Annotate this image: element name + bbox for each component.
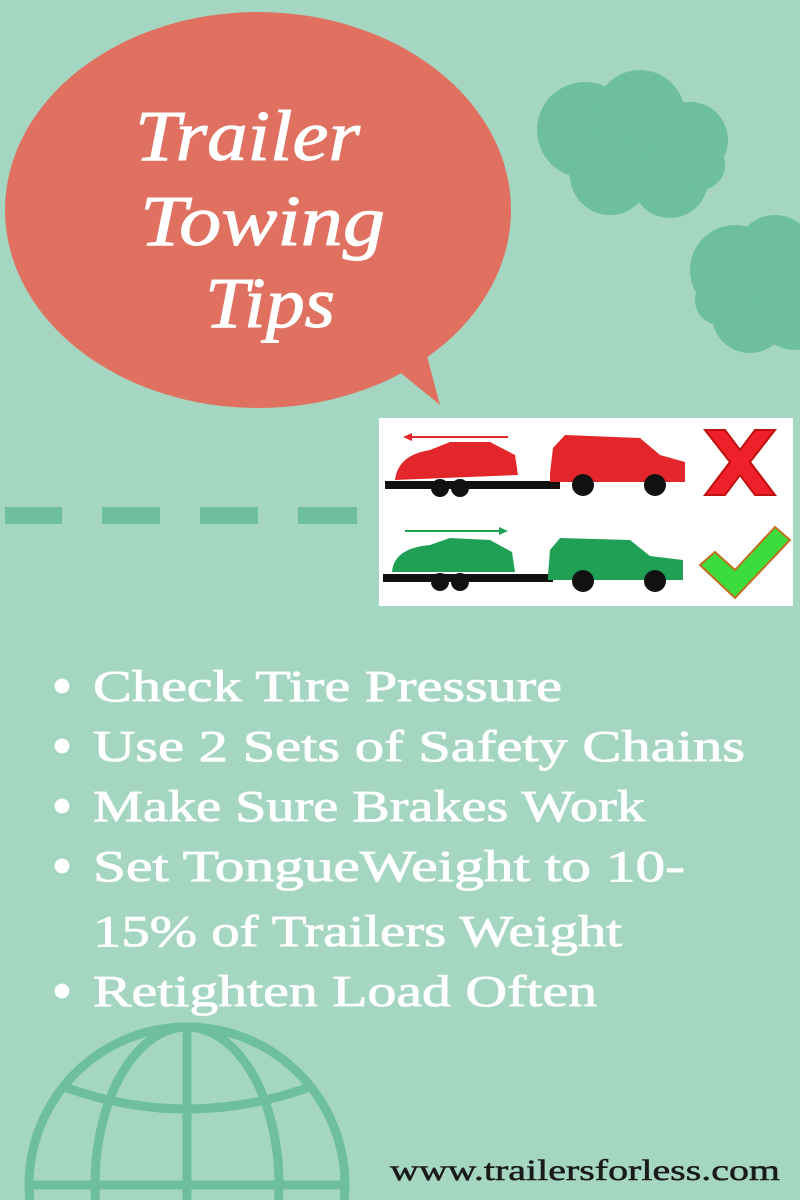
title: Trailer	[135, 96, 361, 176]
icon: green check	[700, 527, 790, 598]
title	[135, 96, 385, 343]
icon: globe	[29, 1027, 345, 1200]
tips list: 15% of Trailers Weight	[93, 907, 622, 956]
tips list: Set TongueWeight to 10-	[93, 842, 685, 891]
tips list	[55, 662, 745, 1016]
towing image panel	[379, 418, 793, 606]
title: Tips	[205, 263, 335, 343]
dashed line	[5, 507, 357, 524]
website url: www.trailersforless.com	[390, 1154, 780, 1187]
tips list: Make Sure Brakes Work	[93, 782, 645, 831]
wrong loading row	[385, 430, 775, 497]
correct loading row	[383, 527, 790, 598]
tips list: Use 2 Sets of Safety Chains	[93, 722, 745, 771]
cloud 1	[537, 70, 728, 218]
title: Towing	[140, 181, 385, 261]
tips list: Check Tire Pressure	[93, 662, 562, 711]
icon: red cross	[705, 430, 775, 495]
speech bubble	[5, 12, 511, 408]
cloud 2	[690, 215, 800, 353]
tips list: Retighten Load Often	[93, 967, 597, 1016]
